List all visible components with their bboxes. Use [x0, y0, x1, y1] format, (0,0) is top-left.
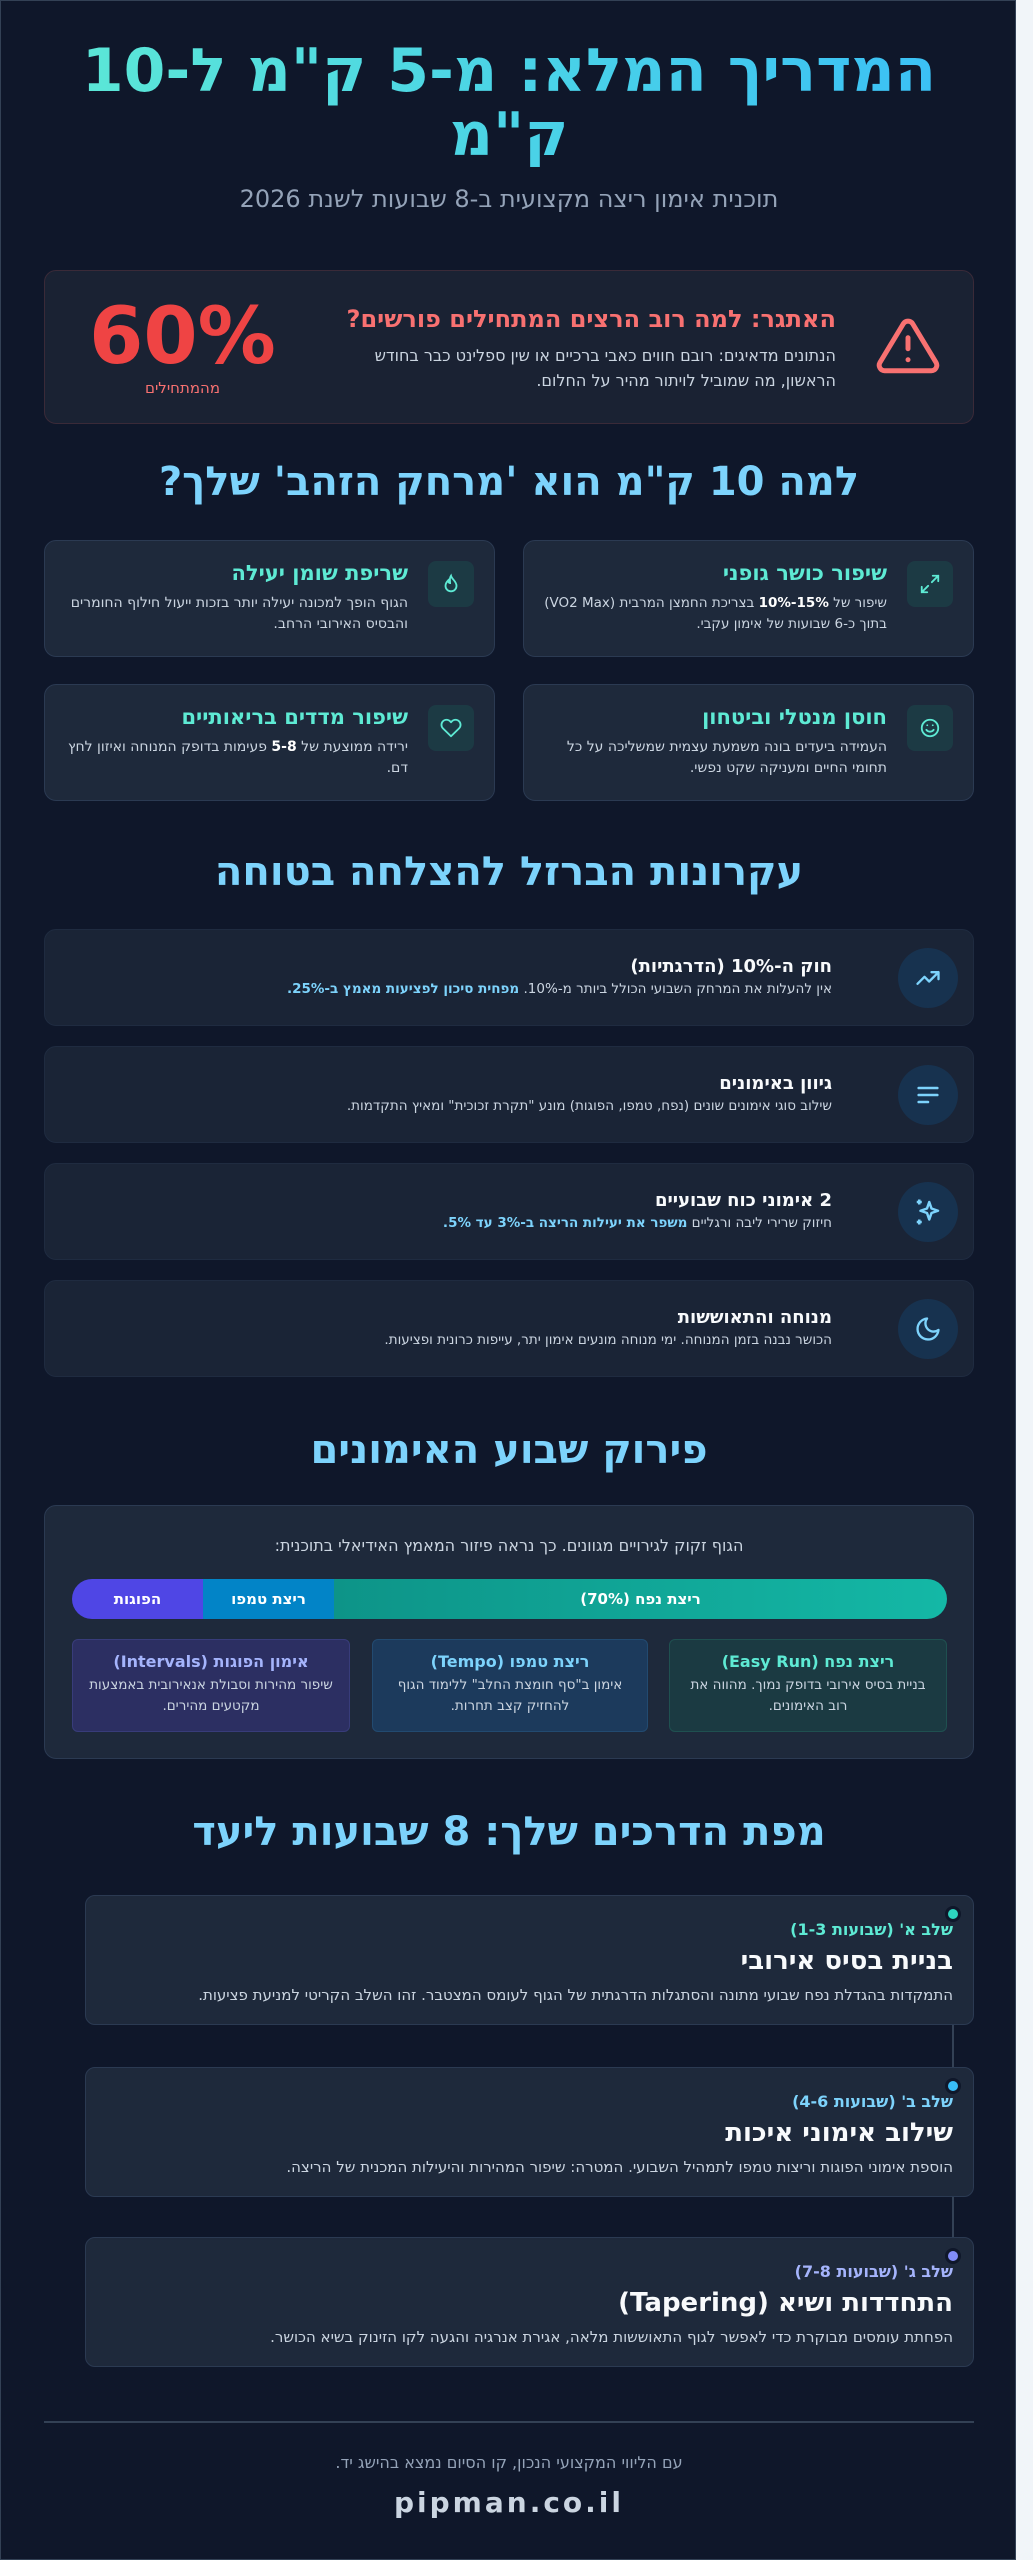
card: tempo: אימון ב"סף חומצת החלב" ללימוד הגוף להחזיק קצב תחרות. [398, 1677, 622, 1714]
card: tempo: ריצת טמפו (Tempo) [431, 1652, 589, 1671]
card: easy run: בניית בסיס אירובי בדופק נמוך. מהווה את רוב האימונים. [690, 1677, 926, 1714]
panel: benefit mental [523, 684, 974, 801]
panel: benefit fat burn: הגוף הופך למכונה יעילה יותר בזכות ייעול חילוף החומרים והבסיס האירובי הרחב. [71, 595, 408, 632]
dot C [945, 2248, 961, 2264]
intro text: הגוף זקוק לגירויים מגוונים. כך נראה פיזור המאמץ האידיאלי בתוכנית: [275, 1536, 743, 1555]
alert text: הנתונים מדאיגים: רובם חווים כאבי ברכיים או שין ספלינט כבר בחודש הראשון, מה שמוביל לויתור מהיר על החלום. [375, 346, 836, 390]
timeline: phase A: התמקדות בהגדלת נפח שבועי מתונה והסתגלות הדרגתית של הגוף לעומס המצטבר. זהו השלב הקריטי למניעת פציעות. [198, 1986, 953, 2004]
icon: sparkles [898, 1182, 958, 1242]
stat: 60%: 60% [89, 292, 276, 382]
panel: principle strength [44, 1163, 974, 1260]
card: intervals [72, 1639, 350, 1732]
panel: principle rest: מנוחה והתאוששות [678, 1307, 832, 1328]
heading: roadmap: מפת הדרכים שלך: 8 שבועות ליעד [192, 1809, 826, 1855]
panel: training breakdown [44, 1505, 974, 1759]
heading: training week: פירוק שבוע האימונים [310, 1427, 708, 1473]
dot B [945, 2078, 961, 2094]
timeline: phase C: שלב ג' (שבועות 7-8) [795, 2262, 953, 2281]
panel: principle rest [44, 1280, 974, 1377]
panel: principle 10% rule: חוק ה-10% (הדרגתיות) [630, 956, 832, 977]
timeline: phase A [85, 1895, 974, 2025]
panel: benefit fitness: שיפור של 15%-10% בצריכת החמצן המרבית (VO2 Max) בתוך כ-6 שבועות של אימון עקבי. [544, 595, 887, 632]
panel: benefit health [44, 684, 495, 801]
panel: challenge alert [44, 270, 974, 424]
timeline: phase B [85, 2067, 974, 2197]
card: easy run: ריצת נפח (Easy Run) [722, 1652, 894, 1671]
stat: 60%: מהמתחילים [145, 379, 220, 397]
stacked bar: ריצת טמפו [231, 1590, 306, 1608]
card: tempo [372, 1639, 648, 1732]
panel: principle strength: 2 אימוני כוח שבועיים [655, 1190, 832, 1211]
card: intervals: אימון הפוגות (Intervals) [113, 1652, 309, 1671]
panel: principle variety: גיוון באימונים [719, 1073, 832, 1094]
panel: benefit mental: העמידה ביעדים בונה משמעת עצמית שמשליכה על כל תחומי החיים ומעניקה שקט נפשי. [567, 739, 887, 776]
title: ק"מ [450, 100, 568, 170]
heading: principles: עקרונות הברזל להצלחה בטוחה [215, 849, 803, 895]
timeline: phase C: התחדדות ושיא (Tapering) [618, 2288, 953, 2318]
timeline: phase A: שלב א' (שבועות 1-3) [790, 1920, 953, 1939]
subtitle: תוכנית אימון ריצה מקצועית ב-8 שבועות לשנת 2026 [240, 185, 778, 213]
panel: principle 10% rule [44, 929, 974, 1026]
stacked bar [72, 1579, 947, 1619]
icon: flame [428, 561, 474, 607]
panel: benefit fat burn: שריפת שומן יעילה [231, 561, 408, 585]
panel: principle 10% rule: אין להעלות את המרחק השבועי הכולל ביותר מ-10%. מפחית סיכון לפציעות מאמץ ב-25%. [287, 981, 832, 997]
icon: smile [907, 705, 953, 751]
icon: lines [898, 1065, 958, 1125]
timeline: phase B: שלב ב' (שבועות 4-6) [792, 2092, 953, 2111]
timeline: phase C [85, 2237, 974, 2367]
panel: principle rest: הכושר נבנה בזמן המנוחה. ימי מנוחה מונעים אימון יתר, עייפות כרונית ופציעות. [384, 1332, 832, 1348]
card: intervals: שיפור מהירות וסבולת אנאירובית באמצעות מקטעים מהירים. [89, 1677, 333, 1714]
icon: expand [907, 561, 953, 607]
icon: moon [898, 1299, 958, 1359]
panel: benefit health: שיפור מדדים בריאותיים [181, 705, 408, 729]
panel: benefit fat burn [44, 540, 495, 657]
timeline: phase C: הפחתת עומסים מבוקרת כדי לאפשר לגוף התאוששות מלאה, אגירת אנרגיה והגעה לקו הזינוק בשיא הכושר. [270, 2328, 953, 2346]
panel: benefit health: ירידה ממוצעת של 5-8 פעימות בדופק המנוחה ואיזון לחץ דם. [68, 739, 408, 776]
timeline: phase B: שילוב אימוני איכות [725, 2118, 953, 2148]
alert heading: האתגר: למה רוב הרצים המתחילים פורשים? [347, 305, 836, 333]
icon: warning triangle [876, 318, 940, 374]
heading: why 10km: למה 10 ק"מ הוא 'מרחק הזהב' שלך? [159, 459, 859, 505]
icon: trending up [898, 948, 958, 1008]
panel: principle variety [44, 1046, 974, 1143]
footer brand: pipman.co.il [394, 2486, 624, 2519]
panel: principle strength: חיזוק שרירי ליבה ורגליים משפר את יעילות הריצה ב-3% עד 5%. [443, 1215, 832, 1231]
panel: benefit fitness: שיפור כושר גופני [723, 561, 887, 585]
panel: principle variety: שילוב סוגי אימונים שונים (נפח, טמפו, הפוגות) מונע "תקרת זכוכית" ומאיץ התקדמות. [347, 1098, 832, 1114]
stacked bar: הפוגות [114, 1590, 161, 1608]
dot A [945, 1906, 961, 1922]
panel: benefit fitness [523, 540, 974, 657]
panel: benefit mental: חוסן מנטלי וביטחון [702, 705, 887, 729]
icon: heart [428, 705, 474, 751]
title: המדריך המלא: מ-5 ק"מ ל-10 [82, 36, 936, 106]
timeline connector line [952, 1916, 954, 2246]
timeline: phase B: הוספת אימוני הפוגות וריצות טמפו לתמהיל השבועי. המטרה: שיפור המהירות והיעילות המכנית של הריצה. [286, 2158, 953, 2176]
timeline: phase A: בניית בסיס אירובי [741, 1946, 953, 1976]
footer text: עם הליווי המקצועי הנכון, קו הסיום נמצא בהישג יד. [335, 2453, 683, 2472]
title [1, 39, 1017, 167]
card: easy run [669, 1639, 947, 1732]
stacked bar: ריצת נפח (70%) [580, 1590, 701, 1608]
